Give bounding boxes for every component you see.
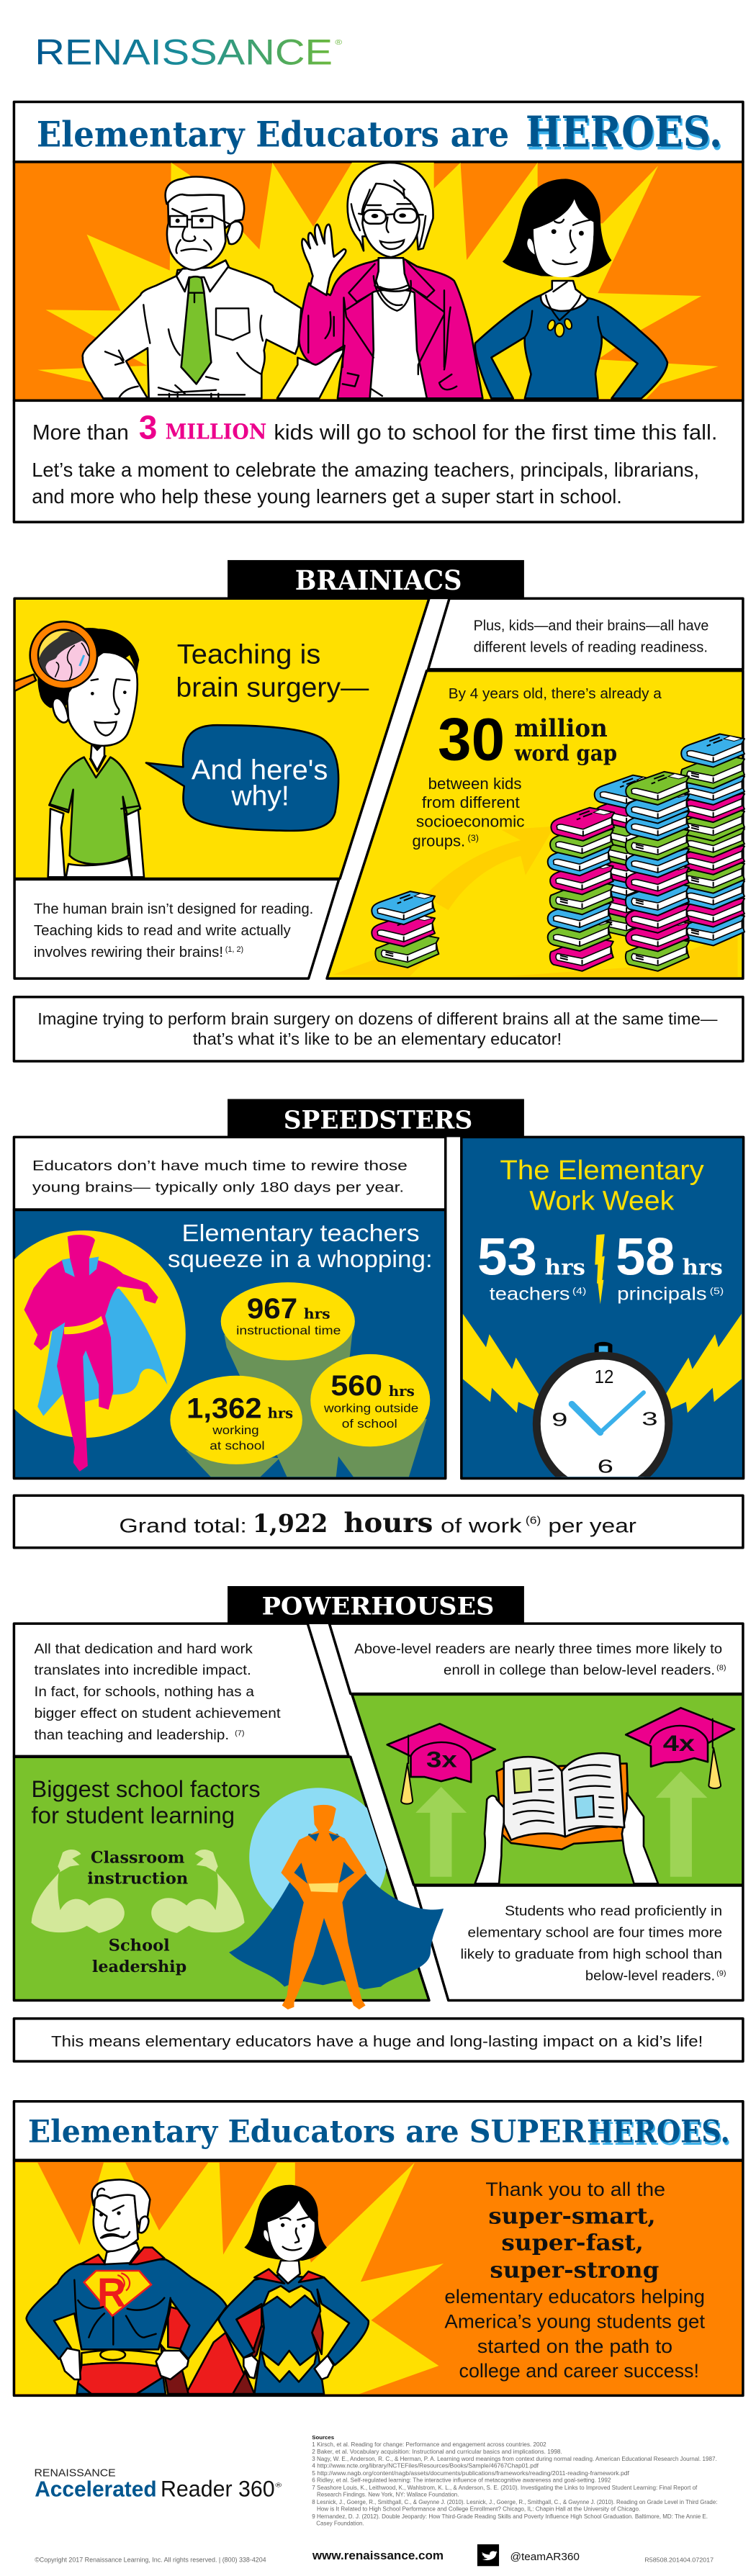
callout: imagine brain surgery: that’s what it’s like to be an elementary educator! [193, 1030, 562, 1048]
panel: word gap: socioeconomic [416, 813, 525, 831]
spotlight beams [186, 1328, 427, 1477]
panel: graduation text: (9) [716, 1969, 726, 1977]
panel: superheroes title [14, 2102, 743, 2160]
text: thank you: super-smart, [488, 2203, 656, 2229]
text block: sources: Casey Foundation. [316, 2521, 364, 2527]
panel: dedication text: than teaching and leadership. [35, 1727, 229, 1743]
panel: title strip [14, 102, 743, 162]
figure: man in tie [83, 177, 346, 398]
stat: 53 hrs teachers: teachers [490, 1283, 570, 1304]
text block: sources: 2 Baker, et al. Vocabulary acquisition: Instructional and curricular basics and implications. 1998. [312, 2449, 562, 2455]
icon: graduation cap 3x [387, 1724, 495, 1804]
starburst [15, 2163, 444, 2394]
stat: 30 million word gap: word gap [514, 740, 617, 766]
stat: 1,362 hrs: 1,362 [186, 1392, 262, 1424]
stat: 58 hrs principals [616, 1228, 724, 1304]
starburst [37, 163, 719, 399]
panel: college enrollment: (8) [716, 1663, 726, 1672]
label: classroom instruction [87, 1847, 188, 1888]
logo: Accelerated Reader 360 [35, 2467, 282, 2502]
logo: Accelerated Reader 360: Accelerated [35, 2477, 157, 2502]
heading: the elementary work week: Work Week [529, 1185, 674, 1216]
text block: sources: Sources [312, 2435, 334, 2441]
callout: long-lasting impact [14, 2019, 743, 2061]
icon: graduation cap 4x: 4x [663, 1731, 695, 1756]
callout: grand total: per year [548, 1514, 636, 1537]
text: teaching is brain surgery [176, 639, 369, 703]
panel: reading fact: (1, 2) [225, 945, 243, 954]
heading: BRAINIACS [228, 560, 524, 599]
section: heroes intro [14, 32, 743, 522]
stat: 30 million word gap: 30 [438, 706, 505, 773]
icon: flexed arms [32, 1850, 245, 1933]
callout: and here's why [146, 725, 338, 831]
label: school leadership [92, 1935, 186, 1976]
figure: pink running hero [0, 1230, 186, 1472]
panel: word gap: from different [422, 793, 520, 811]
text block: sources: 4 http://www.ncte.org/library/NCTEFiles/Resources/Books/Sample/46767Chap01.pdf [312, 2463, 539, 2469]
panel: dedication text: In fact, for schools, nothing has a [35, 1684, 255, 1700]
stat: 3 million [139, 409, 266, 446]
heading: BRAINIACS: BRAINIACS [295, 564, 462, 596]
callout: grand total: 1,922 [253, 1509, 328, 1539]
panel: word gap: groups. [413, 832, 465, 850]
icon: tall stacks of books [548, 734, 744, 971]
stat: 30 million word gap [438, 706, 617, 773]
stat: 1,362 hrs: at school [210, 1439, 265, 1452]
logo: Accelerated Reader 360: ® [275, 2482, 282, 2489]
icon: divider lightning bolt [595, 1234, 605, 1304]
icon: lightning bolts [463, 1314, 742, 1413]
heading: POWERHOUSES [228, 1586, 524, 1624]
stat: 3 million: 3 [139, 409, 157, 446]
panel: teaching is brain surgery [14, 598, 429, 878]
logo: Renaissance: ® [335, 39, 343, 47]
stat: 3 million: MILLION [166, 420, 266, 444]
stat: 58 hrs principals: 58 [616, 1228, 675, 1287]
panel: dedication text: translates into incredible impact. [35, 1662, 251, 1678]
heading: POWERHOUSES: POWERHOUSES [262, 1593, 494, 1621]
figure: woman in blue [475, 179, 667, 398]
figure: male superhero [27, 2179, 254, 2394]
stat: 53 hrs teachers: hrs [545, 1255, 585, 1280]
section: superheroes [14, 2102, 743, 2566]
callout: grand total: of work [441, 1514, 522, 1537]
text: thank you: Thank you to all the [485, 2179, 665, 2200]
panel: limited time [14, 1137, 446, 1210]
label: school leadership: leadership [92, 1957, 186, 1976]
figure: male superhero: R [97, 2271, 126, 2316]
panel: word gap: By 4 years old, there’s already a [449, 685, 662, 702]
text: teachers squeeze: squeeze in a whopping: [168, 1246, 433, 1273]
panel: college enrollment [329, 1623, 743, 1694]
panel: dedication text [14, 1623, 348, 1756]
logo: Renaissance: RENAISSANCE [35, 32, 333, 72]
stat: 1,362 hrs: working [212, 1423, 259, 1437]
text: thank you: super-fast, [501, 2230, 644, 2256]
icon: stopwatch clock: 6 [598, 1456, 613, 1477]
panel: elementary work week [462, 1137, 744, 1492]
callout: and here's why: And here's [192, 754, 328, 785]
stat: 967 hrs: instructional time [236, 1324, 341, 1337]
stat: 53 hrs teachers [477, 1228, 586, 1304]
icon: twitter [477, 2544, 499, 2566]
text block: sources: 6 Ridley, et al. Self-regulated learning: The interactive influence of metacognitive awareness and goal-setting. 1992 [312, 2477, 611, 2484]
panel: educators illustration [14, 162, 743, 400]
text: website: www.renaissance.com [312, 2548, 444, 2562]
figure: woman in pink jacket [299, 163, 482, 398]
stat: 1,362 hrs: hrs [268, 1405, 293, 1422]
callout: grand total: hours [343, 1507, 433, 1539]
title: Elementary Educators are: Elementary Educators are [37, 114, 509, 155]
panel: biggest school factors [14, 1757, 429, 2001]
callout: grand total: (6) [526, 1515, 541, 1526]
stat: 53 hrs teachers: 53 [477, 1228, 537, 1287]
text: biggest school factors: for student learning [32, 1802, 235, 1829]
stat: 1,362 hrs [170, 1376, 302, 1464]
panel: limited time: young brains— typically only 180 days per year. [32, 1180, 404, 1195]
stat: 53 hrs teachers: (4) [572, 1286, 586, 1297]
figure: orange hero with cape [229, 1805, 444, 2009]
text: document code: R58508.201404.072017 [644, 2557, 714, 2564]
text: thank you: super-strong [490, 2257, 659, 2283]
panel: thank you illustration [14, 2161, 743, 2395]
icon: stopwatch clock [536, 1342, 669, 1492]
panel: limited time: Educators don’t have much time to rewire those [32, 1158, 408, 1174]
section: brainiacs [14, 560, 744, 1061]
text: teachers squeeze: Elementary teachers [181, 1220, 420, 1247]
stat: 58 hrs principals: hrs [683, 1255, 723, 1280]
section: powerhouses [14, 1586, 743, 2061]
panel: dedication text: bigger effect on student achievement [35, 1706, 281, 1721]
callout: imagine brain surgery [14, 997, 743, 1061]
label: school leadership: School [109, 1935, 170, 1955]
text: biggest school factors: Biggest school factors [32, 1776, 261, 1802]
panel: dedication text: (7) [235, 1729, 245, 1737]
stat: 967 hrs: hrs [304, 1306, 330, 1323]
icon: stopwatch clock: 12 [595, 1366, 613, 1387]
stat: 967 hrs [221, 1282, 355, 1361]
panel: word gap: (3) [468, 833, 479, 843]
stat: 58 hrs principals: (5) [710, 1286, 724, 1297]
text: twitter handle: @teamAR360 [510, 2551, 580, 2563]
icon: small stack of books [372, 891, 438, 968]
panel: word gap: between kids [428, 775, 522, 793]
callout: and here's why: why! [231, 780, 289, 811]
text block: sources: 1 Kirsch, et al. Reading for change: Performance and engagement across countries. 2002 [312, 2442, 546, 2448]
logo: Accelerated Reader 360: RENAISSANCE [35, 2467, 116, 2480]
panel: book and graduation caps [352, 1695, 743, 1885]
panel: reading fact: Teaching kids to read and write actually [34, 923, 291, 939]
panel: intro text: More than [32, 420, 129, 444]
stat: 560 hrs [310, 1354, 430, 1446]
text: thank you: started on the path to [477, 2336, 672, 2357]
stat: 967 hrs: 967 [247, 1292, 297, 1324]
text: teachers squeeze [168, 1220, 433, 1273]
stat: 560 hrs: 560 [330, 1369, 382, 1402]
panel: dedication text: All that dedication and hard work [35, 1641, 253, 1657]
text: biggest school factors [32, 1776, 261, 1829]
figure: boy with magnifier [14, 621, 144, 877]
panel: whopping hours [0, 1210, 446, 1478]
icon: stopwatch clock: 3 [642, 1409, 658, 1430]
section: speedsters [0, 1099, 744, 1548]
text: copyright: ©Copyright 2017 Renaissance Learning, Inc. All rights reserved. | (800) 338-4204 [35, 2557, 266, 2564]
panel: graduation text [415, 1886, 743, 2001]
label: classroom instruction: Classroom [91, 1847, 184, 1867]
stat: 560 hrs: hrs [389, 1383, 415, 1400]
panel: reading fact: involves rewiring their brains! [34, 945, 223, 960]
icon: open book held by hands [475, 1753, 658, 1883]
callout: grand total [14, 1495, 743, 1548]
panel: reading fact [14, 879, 339, 978]
stat: 560 hrs: of school [342, 1418, 397, 1431]
heading: SPEEDSTERS: SPEEDSTERS [284, 1105, 472, 1135]
callout: grand total: Grand total: [119, 1514, 247, 1537]
label: classroom instruction: instruction [87, 1868, 188, 1888]
panel: word gap [327, 671, 744, 978]
logo: Accelerated Reader 360: Reader 360 [161, 2477, 275, 2502]
icon: magnifier with brain [14, 621, 97, 691]
text block: sources: 5 http://www.nagb.org/content/nagb/assets/documents/publications/frameworks/reading/2011-reading-framework.pdf [312, 2471, 629, 2477]
text: teaching is brain surgery: Teaching is [177, 639, 320, 670]
panel: intro text [14, 400, 743, 522]
heading: the elementary work week [500, 1154, 704, 1216]
stat: 30 million word gap: million [515, 714, 608, 742]
stat: 560 hrs: working outside [323, 1402, 418, 1415]
text: teaching is brain surgery: brain surgery— [176, 672, 369, 703]
icon: graduation cap 3x: 3x [426, 1747, 457, 1773]
stat: 58 hrs principals: principals [617, 1283, 707, 1304]
text block: sources [312, 2435, 717, 2527]
heading: SPEEDSTERS [228, 1099, 524, 1137]
panel: reading fact: The human brain isn’t designed for reading. [34, 901, 313, 917]
figure: female superhero [218, 2185, 369, 2394]
icon: graduation cap 4x [626, 1708, 734, 1788]
text: thank you [444, 2179, 705, 2382]
icon: up arrows [415, 1771, 707, 1877]
icon: stopwatch clock: 9 [552, 1410, 567, 1431]
panel: reading readiness [428, 598, 743, 670]
text block: sources: Research Findings. New York, NY: Wallace Foundation. [317, 2492, 459, 2498]
